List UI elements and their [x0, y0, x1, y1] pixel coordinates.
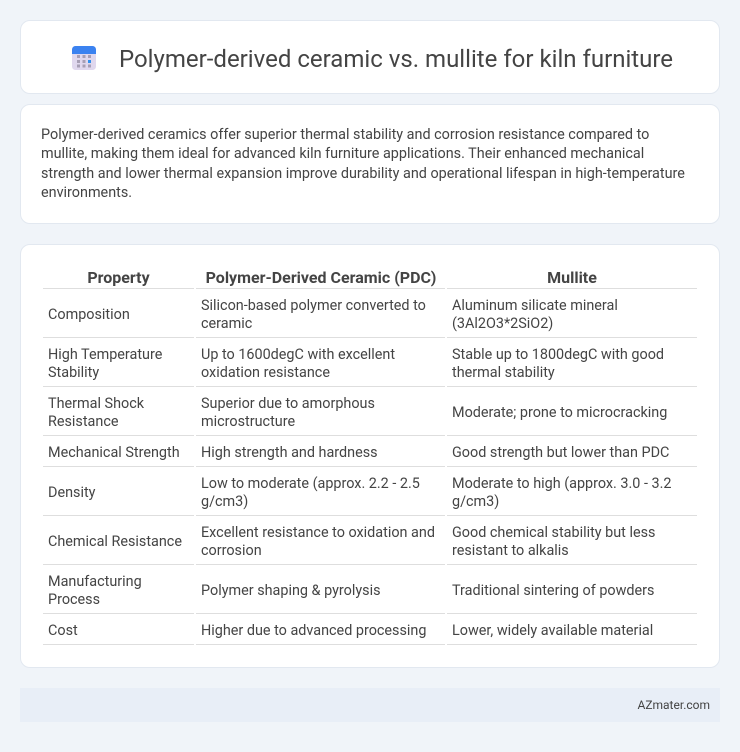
table header: mullite: Mullite — [547, 268, 597, 287]
table rows: Low to moderate (approx. 2.2 - 2.5 — [201, 475, 420, 492]
table rows: Moderate; prone to microcracking — [452, 404, 667, 421]
table rows: resistant to alkalis — [452, 542, 569, 559]
panel: summary — [20, 104, 720, 224]
table rows: Lower, widely available material — [452, 622, 653, 639]
table rows: Excellent resistance to oxidation and — [201, 524, 435, 541]
summary text: strength and lower thermal expansion improve durability and operational lifespan in high-temperature — [41, 165, 685, 182]
summary text — [41, 126, 685, 201]
table rows: Density — [48, 484, 95, 501]
summary text: mullite, making them ideal for advanced kiln furniture applications. Their enhanced mechanical — [41, 145, 644, 162]
table rows: g/cm3) — [452, 493, 499, 510]
table rows: Up to 1600degC with excellent — [201, 346, 395, 363]
table rows: Chemical Resistance — [48, 533, 182, 550]
table rows: microstructure — [201, 413, 295, 430]
table rows: Thermal Shock — [48, 395, 144, 412]
table rows: oxidation resistance — [201, 364, 330, 381]
table rows: Traditional sintering of powders — [452, 582, 654, 599]
table rows: Higher due to advanced processing — [201, 622, 426, 639]
table rows: Polymer shaping & pyrolysis — [201, 582, 380, 599]
footer bar — [20, 688, 720, 722]
table rows: Aluminum silicate mineral — [452, 297, 618, 314]
table rows: Superior due to amorphous — [201, 395, 375, 412]
table rows: (3Al2O3*2SiO2) — [452, 315, 553, 332]
footer credit: AZmater.com — [637, 698, 710, 712]
title: Polymer-derived ceramic vs. mullite for kiln furniture — [119, 45, 673, 73]
table rows: Good strength but lower than PDC — [452, 444, 669, 461]
table header: polymer-derived ceramic: Polymer-Derived Ceramic (PDC) — [206, 268, 436, 287]
table rows: ceramic — [201, 315, 252, 332]
table rows: Resistance — [48, 413, 118, 430]
table rows: Silicon-based polymer converted to — [201, 297, 426, 314]
table header: property: Property — [87, 268, 150, 287]
table rows: Stability — [48, 364, 99, 381]
table rows: Stable up to 1800degC with good — [452, 346, 664, 363]
table rows: Composition — [48, 306, 130, 323]
table rows: Manufacturing — [48, 573, 142, 590]
table rows: Process — [48, 591, 100, 608]
icon: calendar grid — [72, 46, 96, 70]
panel: comparison table — [20, 244, 720, 668]
table rows: Mechanical Strength — [48, 444, 180, 461]
table rows: High strength and hardness — [201, 444, 378, 461]
table rows: g/cm3) — [201, 493, 248, 510]
table rows: Moderate to high (approx. 3.0 - 3.2 — [452, 475, 671, 492]
table rows: Cost — [48, 622, 78, 639]
table rows: corrosion — [201, 542, 262, 559]
summary text: Polymer-derived ceramics offer superior thermal stability and corrosion resistance compared to — [41, 126, 649, 143]
panel: title header — [20, 20, 720, 94]
table rows: thermal stability — [452, 364, 555, 381]
table rows: Good chemical stability but less — [452, 524, 655, 541]
summary text: environments. — [41, 184, 132, 201]
table rows: High Temperature — [48, 346, 162, 363]
